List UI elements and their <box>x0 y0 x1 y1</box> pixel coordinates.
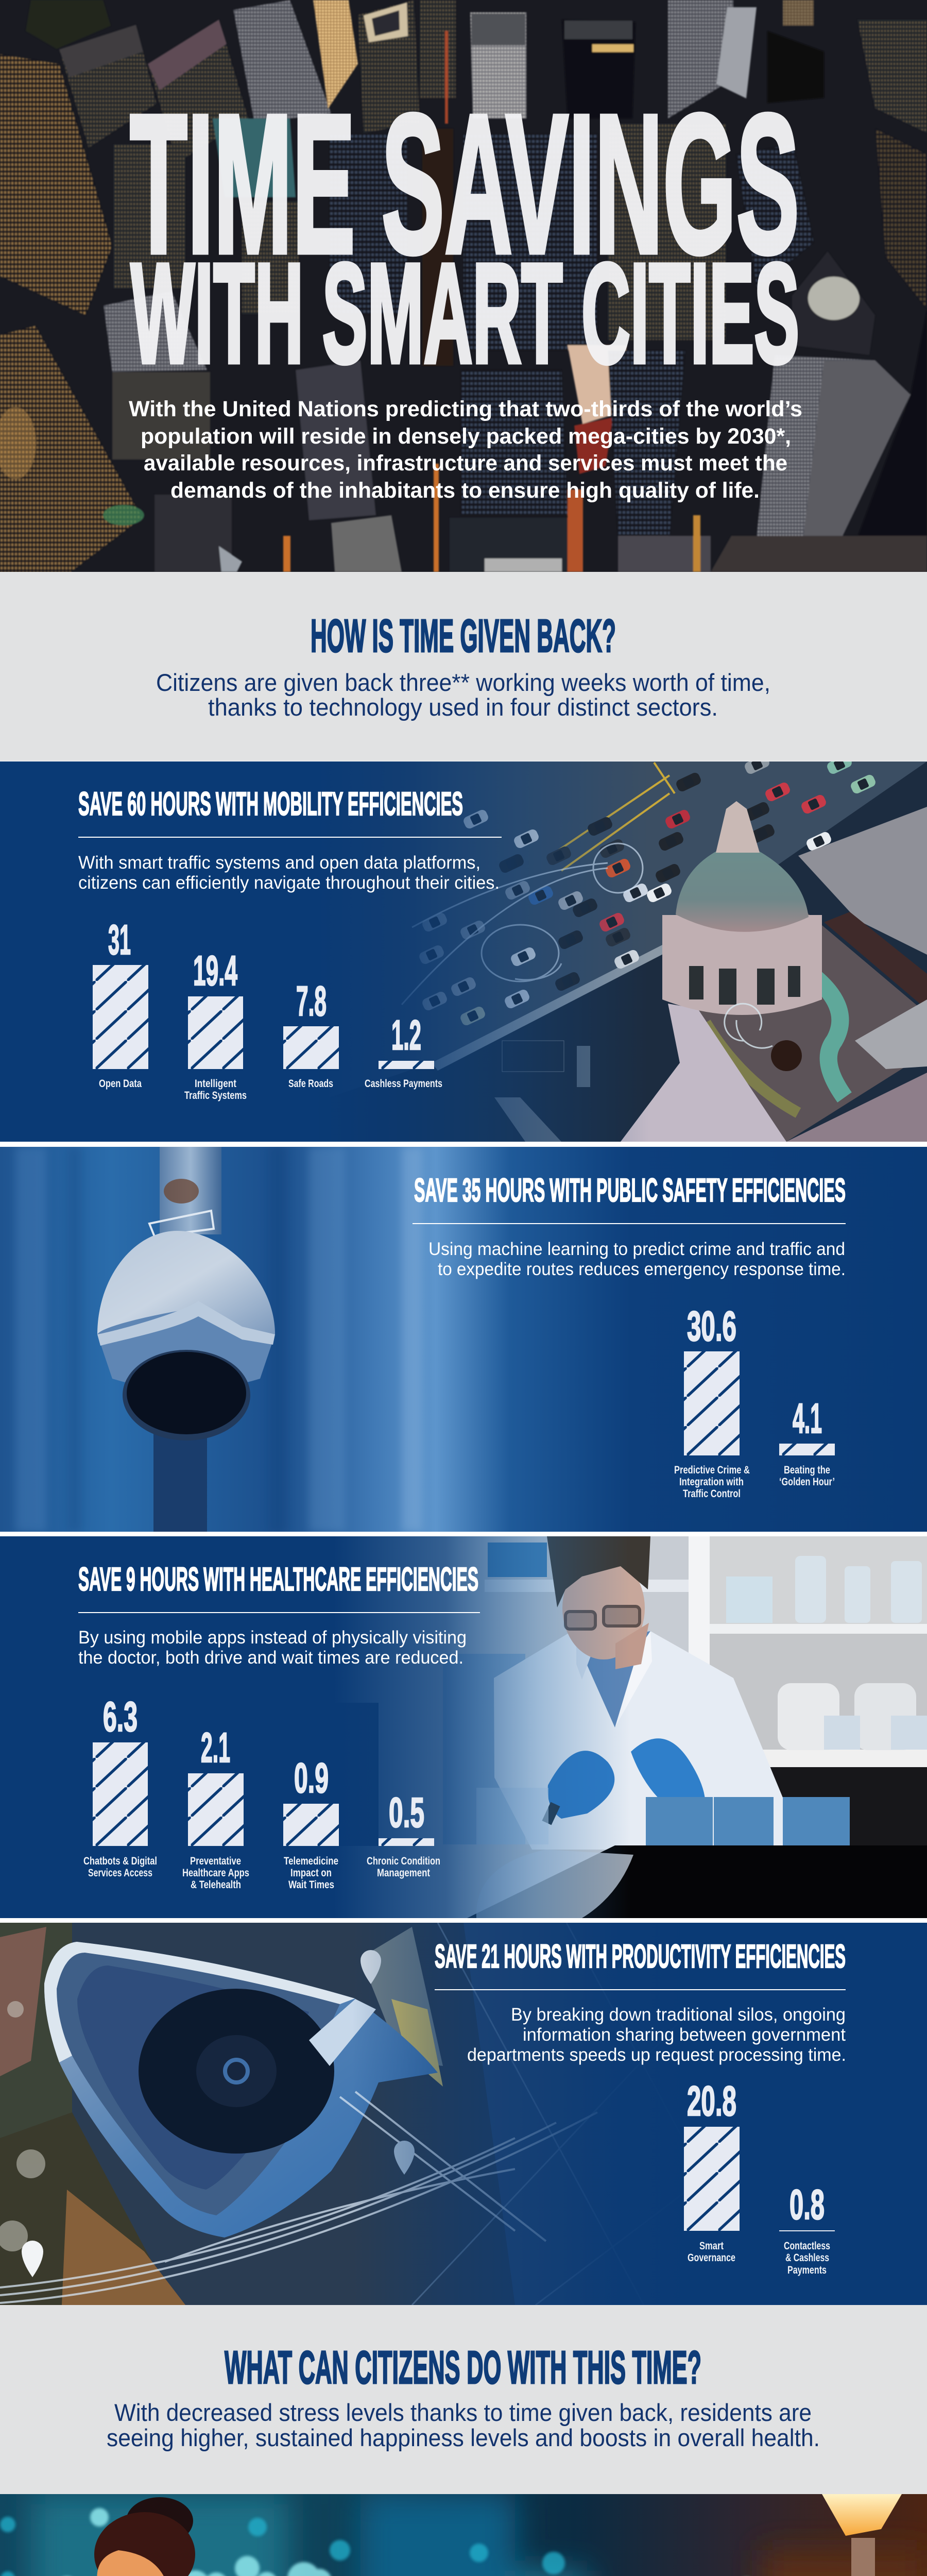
bar: Safe Roads <box>283 978 339 1090</box>
navy overlay <box>0 1923 927 2305</box>
bar: Beating the Golden Hour: 4.1 <box>793 1395 822 1442</box>
description <box>78 853 500 893</box>
navy overlay <box>0 761 927 1142</box>
bar chart: healthcare <box>83 1693 440 1891</box>
bar: Preventative Healthcare: 2.1 <box>201 1724 230 1771</box>
bar: Smart Governance: Smart <box>699 2240 724 2252</box>
description: With decreased stress levels thanks to time given back, residents are <box>114 2399 812 2426</box>
bar: Beating the Golden Hour <box>779 1395 835 1488</box>
bar chart: public safety <box>674 1303 835 1500</box>
description <box>428 1239 846 1279</box>
bar: Chatbots: 6.3 <box>103 1693 138 1740</box>
bar: Cashless Payments <box>365 1012 442 1090</box>
bar: Cashless Payments: Cashless Payments <box>365 1078 442 1090</box>
bar: Safe Roads: 7.8 <box>296 978 327 1025</box>
description: By breaking down traditional silos, ongoing <box>511 2005 846 2025</box>
bar: Intelligent Traffic Systems: Traffic Systems <box>184 1090 247 1101</box>
description: information sharing between government <box>523 2025 846 2045</box>
bar: Contactless and Cashless Payments: 0.8 <box>789 2181 825 2228</box>
bar: Contactless and Cashless Payments: Payments <box>787 2264 827 2276</box>
bar: Chronic Condition: Chronic Condition <box>367 1855 440 1867</box>
hero photo: night city skyline <box>0 0 927 572</box>
bar: Cashless Payments: 1.2 <box>391 1012 421 1059</box>
title <box>130 73 799 393</box>
bar: Contactless and Cashless Payments <box>779 2181 835 2276</box>
bar: Preventative Healthcare: Healthcare Apps <box>182 1867 249 1879</box>
bar: Smart Governance: 20.8 <box>687 2078 736 2125</box>
bar: Chatbots <box>83 1693 157 1879</box>
description: seeing higher, sustained happiness levels and boosts in overall health. <box>107 2424 820 2451</box>
bar: Predictive Crime <box>674 1303 750 1500</box>
photo: traffic and domed building <box>333 761 927 1142</box>
bar: Smart Governance <box>684 2078 740 2264</box>
bar: Telemedicine <box>283 1755 339 1891</box>
description: departments speeds up request processing time. <box>467 2045 846 2065</box>
description: By using mobile apps instead of physically visiting <box>78 1628 467 1648</box>
bar: Predictive Crime: Predictive Crime & <box>674 1464 750 1476</box>
photo: scientist in lab <box>0 1536 927 1918</box>
panel: productivity <box>0 1923 927 2305</box>
bar: Chronic Condition <box>367 1789 440 1879</box>
panel: public safety <box>0 1147 927 1532</box>
panel: hero <box>0 0 927 572</box>
photo: aerial tower with city data lines <box>0 1923 927 2305</box>
description <box>78 1628 467 1668</box>
description: the doctor, both drive and wait times are reduced. <box>78 1648 464 1668</box>
subheading text: thanks to technology used in four distinct sectors. <box>208 693 718 721</box>
heading: SAVE 60 HOURS WITH MOBILITY EFFICIENCIES <box>78 785 463 822</box>
description: Using machine learning to predict crime and traffic and <box>428 1239 845 1259</box>
bar: Contactless and Cashless Payments: & Cashless <box>785 2252 829 2264</box>
description <box>107 2399 820 2451</box>
bar: Smart Governance: Governance <box>688 2252 735 2264</box>
bar: Telemedicine: Impact on <box>290 1867 332 1879</box>
bar chart: productivity <box>684 2078 835 2276</box>
description: to expedite routes reduces emergency response time. <box>438 1259 846 1279</box>
panel: healthcare: SAVE 9 HOURS WITH HEALTHCARE EFFICIENCIES <box>78 1561 478 1598</box>
bar: Contactless and Cashless Payments: Contactless <box>784 2240 830 2252</box>
bar: Chronic Condition: 0.5 <box>389 1789 424 1836</box>
bar: Chatbots: Chatbots & Digital <box>83 1855 157 1867</box>
panel: healthcare <box>0 1536 927 1918</box>
bar: Preventative Healthcare <box>182 1724 249 1891</box>
intro text: available resources, infrastructure and services must meet the <box>144 451 787 476</box>
bar: Open Data <box>93 917 148 1090</box>
bar: Telemedicine: Telemedicine <box>284 1855 338 1867</box>
bar: Intelligent Traffic Systems: 19.4 <box>193 947 237 994</box>
bar: Chatbots: Services Access <box>88 1867 152 1879</box>
bar: Open Data: 31 <box>108 917 131 963</box>
photo: woman with phone at night <box>0 2494 927 2576</box>
bar: Intelligent Traffic Systems: Intelligent <box>195 1078 236 1090</box>
intro text: demands of the inhabitants to ensure high quality of life. <box>170 478 760 503</box>
panel: how is time given back <box>0 572 927 761</box>
bar: Telemedicine: 0.9 <box>294 1755 329 1802</box>
bar: Preventative Healthcare: & Telehealth <box>191 1879 241 1891</box>
panel: how is time given back: HOW IS TIME GIVEN BACK? <box>311 611 616 662</box>
bar chart: mobility <box>93 917 442 1101</box>
photo: security camera <box>0 1147 927 1532</box>
panel: mobility <box>0 754 927 1142</box>
bar: Safe Roads: Safe Roads <box>288 1078 333 1090</box>
bar: Beating the Golden Hour: ‘Golden Hour’ <box>779 1476 835 1488</box>
subheading text <box>156 669 770 721</box>
description <box>467 2005 846 2065</box>
bar: Telemedicine: Wait Times <box>288 1879 334 1891</box>
bar: Open Data: Open Data <box>99 1078 142 1090</box>
bar: Intelligent Traffic Systems <box>184 947 247 1101</box>
bar: Predictive Crime: Integration with <box>679 1476 744 1488</box>
bar: Predictive Crime: 30.6 <box>687 1303 736 1350</box>
subheading text: Citizens are given back three** working weeks worth of time, <box>156 669 770 696</box>
description: citizens can efficiently navigate throughout their cities. <box>78 873 500 893</box>
bar: Beating the Golden Hour: Beating the <box>784 1464 830 1476</box>
bar: Preventative Healthcare: Preventative <box>190 1855 241 1867</box>
bar: Predictive Crime: Traffic Control <box>683 1488 741 1500</box>
bar: Chronic Condition: Management <box>377 1867 430 1879</box>
intro text <box>129 397 802 503</box>
description: With smart traffic systems and open data platforms, <box>78 853 480 873</box>
navy overlay <box>0 1536 927 1918</box>
panel: activities photo <box>0 2494 927 2576</box>
intro text: population will reside in densely packed mega-cities by 2030*, <box>141 424 791 449</box>
panel: what can citizens do <box>0 2305 927 2494</box>
intro text: With the United Nations predicting that two-thirds of the world’s <box>129 397 802 421</box>
